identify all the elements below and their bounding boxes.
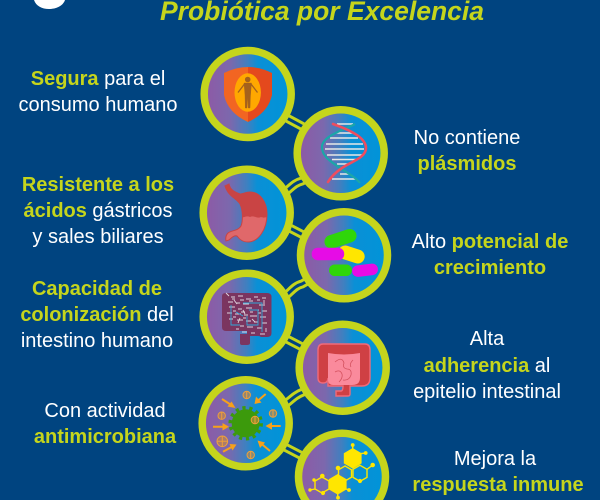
text: segura	[19, 68, 177, 116]
text: adherencia: Alta	[470, 328, 505, 350]
logo fragment	[34, 0, 65, 9]
text: resistente: ácidos gástricos	[24, 200, 172, 222]
bacterium: green lower	[329, 264, 352, 276]
text: antimicrobiana: Con actividad	[44, 400, 166, 422]
text: resistente: Resistente a los	[22, 174, 174, 196]
text: potencial: Alto potencial de	[412, 231, 568, 253]
text: colonizacion: Capacidad de	[32, 278, 162, 300]
badge: DNA helix	[297, 110, 384, 197]
badge: antimicrobial	[202, 380, 289, 467]
text: antimicrobiana	[34, 400, 177, 448]
text: adherencia: epitelio intestinal	[413, 381, 561, 403]
connectors	[281, 116, 309, 458]
badge: stomach	[203, 169, 290, 256]
text: segura: consumo humano	[19, 94, 177, 116]
text: respuesta inmune	[412, 448, 584, 496]
text: plasmidos: No contiene	[414, 127, 520, 149]
badge: colon with microbiota	[203, 273, 290, 360]
text: colonizacion	[20, 278, 174, 352]
text: plasmidos	[414, 127, 520, 175]
bacterium: green upper	[323, 227, 358, 250]
text: potencial: crecimiento	[434, 257, 546, 279]
text: adherencia	[413, 328, 561, 403]
text: colonizacion: intestino humano	[21, 330, 173, 352]
bacterium: magenta left	[312, 248, 344, 260]
central green pathogen	[230, 408, 261, 439]
text: antimicrobiana: antimicrobiana	[34, 426, 177, 448]
text: plasmidos: plásmidos	[418, 153, 516, 175]
virus particles	[217, 391, 277, 459]
badge: immune molecules	[298, 433, 386, 500]
text: respuesta inmune: Mejora la	[454, 448, 537, 470]
text: segura: Segura para el	[31, 68, 165, 90]
badge: shield and human figure	[204, 50, 291, 138]
text: resistente: y sales biliares	[32, 226, 164, 248]
bacterium: magenta right	[351, 263, 379, 278]
text: respuesta inmune: respuesta inmune	[412, 474, 584, 496]
text: potencial	[412, 231, 568, 279]
badge: bacteria	[300, 212, 388, 299]
text: colonizacion: colonización del	[20, 304, 174, 326]
orange arrows	[213, 394, 281, 452]
bacterium: yellow	[336, 244, 367, 265]
text: adherencia: adherencia al	[424, 355, 550, 377]
text: resistente	[22, 174, 174, 248]
badge: intestine	[299, 324, 386, 411]
